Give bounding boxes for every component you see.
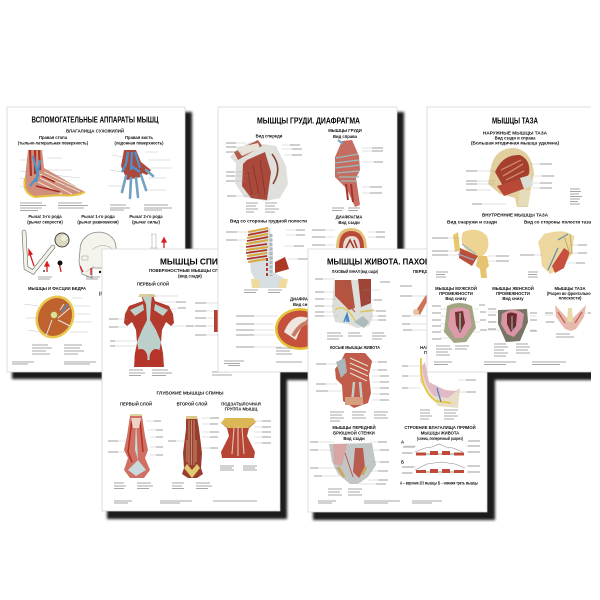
figure: inguinal canal <box>332 279 374 328</box>
footer <box>318 501 442 503</box>
heading: first layer: ПЕРВЫЙ СЛОЙ <box>137 282 169 286</box>
heading: diaphragm bottom view: Вид снизу <box>293 302 315 307</box>
poster: auxiliary apparatus of muscles <box>7 107 185 372</box>
leader lines: chest cavity figure <box>237 230 298 259</box>
figure: diaphragm top view <box>336 228 367 248</box>
figure: deep muscles first layer <box>124 414 150 478</box>
figure: arm with ball <box>24 232 69 272</box>
figure: female perineum <box>498 309 528 342</box>
heading: rectus sheath structure: (схема, поперечный разрез) <box>417 436 463 441</box>
legends: upper figures <box>20 203 172 210</box>
leader lines: internal medial <box>534 245 578 263</box>
legends: anterior wall <box>328 489 362 495</box>
legends: lever figures <box>38 277 100 279</box>
captions: internal views: Вид снаружи и сзади <box>447 220 497 224</box>
leader lines: anterior figure <box>408 296 428 330</box>
heading: diaphragm bottom view <box>290 296 317 307</box>
captions: internal views: Вид со стороны полости таза <box>524 220 592 224</box>
figure: oblique torso <box>335 353 372 408</box>
footer <box>114 501 257 503</box>
figure: external inguinal view <box>420 358 460 408</box>
subheadings: deep layers <box>120 402 261 412</box>
footer <box>434 362 566 364</box>
caption: right hand: (ладонная поверхность) <box>114 140 164 146</box>
heading: external pelvic muscles: (Большая ягодичная мышца удалена) <box>471 140 560 146</box>
poster: chest muscles and diaphragm <box>218 107 397 372</box>
leader lines: sheath diagrams <box>404 446 470 473</box>
legends: surface layer <box>129 370 232 376</box>
poster: abdominal muscles and inguinal canal <box>308 249 487 512</box>
heading: male perineum: Вид снизу <box>445 296 467 301</box>
heading: pelvic muscles frontal section: (Разрез во фронтальной <box>547 291 593 296</box>
heading: pelvic muscles frontal section: плоскости) <box>559 296 582 300</box>
heading: female perineum: Вид снизу <box>502 296 524 301</box>
legends: chest figures <box>246 203 360 212</box>
caption: right hand <box>114 135 164 146</box>
legends: deep figures <box>114 466 257 488</box>
figure: chest side view <box>335 140 360 207</box>
heading: external pelvic muscles: НАРУЖНЫЕ МЫШЦЫ ТАЗА <box>483 130 547 136</box>
heading: anterior abdominal wall: Вид сзади <box>343 436 365 441</box>
leader lines: deep figures <box>118 418 262 455</box>
figure: sheath cross-section A: А <box>401 440 404 444</box>
legends: inguinal canal <box>327 333 386 339</box>
caption: second-class lever: Рычаг 2-го рода <box>129 214 163 219</box>
leader lines: perineum figures <box>440 309 589 338</box>
title: ВСПОМОГАТЕЛЬНЫЕ АППАРАТЫ МЫШЦ <box>32 116 159 124</box>
leader lines and legends: thigh <box>24 298 92 332</box>
heading: pelvic muscles frontal section: МЫШЦЫ ТАЗА <box>554 286 586 291</box>
heading: external pelvic muscles <box>471 130 560 146</box>
legends: oblique torso <box>330 412 388 421</box>
legends and footer <box>224 348 302 366</box>
heading: external pelvic muscles: Вид сзади и справа <box>495 136 536 140</box>
caption: diaphragm top view: Вид сзади <box>338 220 360 225</box>
heading: external (partly hidden) <box>420 345 445 355</box>
caption: chest muscles right view: Вид справа <box>333 134 358 139</box>
figure: sheath cross-section B <box>401 460 465 473</box>
caption: diaphragm top view <box>336 214 362 225</box>
caption: first-class lever <box>77 214 119 224</box>
subheadings: deep layers: ПОДЗАТЫЛОЧНАЯ <box>221 402 261 406</box>
drop shadows behind posters <box>12 112 600 520</box>
icon: black lever weights <box>43 260 101 273</box>
caption: first-class lever: (рычаг равновесия) <box>77 220 119 224</box>
heading: inguinal canal: ПАХОВЫЙ КАНАЛ (вид сзади) <box>332 269 378 274</box>
heading: anterior abdominal wall: МЫШЦЫ ПЕРЕДНЕЙ <box>332 425 376 430</box>
leader lines: anterior wall <box>316 442 380 484</box>
legends: perineum figures <box>436 334 574 356</box>
subheadings: deep layers: ПЕРВЫЙ СЛОЙ <box>120 402 152 406</box>
heading: female perineum <box>492 286 534 301</box>
caption: right foot: Правая стопа <box>39 135 68 140</box>
caption: diaphragm top view: ДИАФРАГМА <box>336 214 362 220</box>
heading: internal pelvic muscles: ВНУТРЕННИЕ МЫШЦЫ ТАЗА <box>482 212 548 218</box>
poster: pelvic muscles <box>427 107 600 372</box>
heading: pelvic muscles frontal section <box>547 287 590 300</box>
figure: male perineum <box>444 303 476 343</box>
infographic: set of five anatomy posters <box>6 106 591 522</box>
figure: foot <box>24 150 85 197</box>
heading: deep back muscles: ГЛУБОКИЕ МЫШЦЫ СПИНЫ <box>156 390 224 396</box>
figure: chest front view <box>230 140 288 201</box>
heading: muscles and fasciae of the thigh: МЫШЦЫ И ФАСЦИИ БЕДРА <box>28 286 87 291</box>
caption: third-class lever <box>27 214 63 224</box>
heading: oblique muscles: КОСЫЕ МЫШЦЫ ЖИВОТА <box>330 345 380 350</box>
caption: chest muscles right view: МЫШЦЫ ГРУДИ <box>328 128 362 133</box>
figure: suboccipital muscles <box>221 418 256 458</box>
heading: external (partly hidden): ПАХОВ <box>424 350 439 355</box>
hidden second-layer figure: labels <box>195 303 220 335</box>
heading: superficial back muscles: ПОВЕРХНОСТНЫЕ МЫШЦЫ СПИНЫ <box>149 268 229 273</box>
subheadings: deep layers: ГРУППА МЫШЦ <box>225 406 258 412</box>
heading: superficial back muscles: (вид сзади) <box>178 274 202 278</box>
figure: deep muscles second layer <box>182 416 203 478</box>
leader lines: diaphragm bottom view <box>254 316 282 347</box>
figure: sheath cross-section B: Б <box>401 460 404 464</box>
heading: male perineum <box>435 286 477 301</box>
caption: chest muscles right view <box>328 128 362 139</box>
heading: rectus sheath structure: МЫШЦЫ ЖИВОТА <box>421 430 459 436</box>
caption: front view: Вид спереди <box>256 134 283 138</box>
figure: internal pelvic muscles lateral <box>453 230 489 278</box>
title: МЫШЦЫ ТАЗА <box>492 116 538 126</box>
heading: rectus sheath structure: СТРОЕНИЕ ВЛАГАЛИЩА ПРЯМОЙ <box>404 425 476 430</box>
figure: leg muscle <box>413 295 429 315</box>
leader lines: inguinal canal <box>323 279 380 320</box>
captions: internal views <box>447 220 591 224</box>
caption: second-class lever: (рычаг силы) <box>132 220 160 224</box>
leader lines: internal lateral <box>448 238 496 261</box>
caption: right foot: (тыльно-латеральная поверхность) <box>18 140 89 146</box>
legend: external pelvic muscles <box>570 189 582 204</box>
title: МЫШЦЫ ЖИВОТА. ПАХОВЫЙ КАНАЛ <box>327 258 473 266</box>
heading: female perineum: ПРОМЕЖНОСТИ <box>496 291 530 296</box>
leader lines: external inguinal view <box>408 366 466 392</box>
leader lines: back torso <box>114 296 186 346</box>
caption: sheath key: А – верхние 2/3 мышцы Б – нижняя треть мышцы <box>400 480 478 486</box>
leader lines: diaphragm top view <box>325 230 376 245</box>
leader lines: external pelvic muscles <box>477 164 542 204</box>
heading: diaphragm bottom view: ДИАФРАГМА <box>290 296 317 302</box>
figure: chest cavity view <box>246 228 289 288</box>
heading: external (partly hidden): НАРУЖНЫЕ <box>420 345 445 350</box>
figure: external pelvic muscles <box>488 148 534 207</box>
heading: male perineum: ПРОМЕЖНОСТИ <box>439 291 473 296</box>
heading: anterior abdominal wall <box>332 425 376 441</box>
icons: red force arrows <box>29 238 166 275</box>
figure: diaphragm bottom view <box>275 308 325 350</box>
caption: third-class lever: (рычаг скорости) <box>27 220 63 224</box>
heading: anterior abdominal wall: БРЮШНОЙ СТЕНКИ <box>333 430 375 436</box>
figure: anterior wall from behind <box>329 443 376 484</box>
footer <box>12 362 96 364</box>
caption: first-class lever: Рычаг 1-го рода <box>81 214 115 219</box>
heading: superficial back muscles <box>149 268 229 278</box>
caption: second-class lever <box>129 214 163 224</box>
figure: sheath cross-section A <box>401 440 464 456</box>
caption: right foot <box>18 135 89 146</box>
caption: third-class lever: Рычаг 3-го рода <box>28 214 62 219</box>
figure: skull <box>79 232 116 278</box>
figure: back torso <box>124 294 174 367</box>
figure: foot bones <box>150 234 158 248</box>
caption: view from chest cavity: Вид со стороны грудной полости <box>230 218 307 224</box>
caption: right hand: Правая кисть <box>125 135 153 140</box>
subheadings: deep layers: ВТОРОЙ СЛОЙ <box>177 402 207 406</box>
heading: male perineum: МЫШЦЫ МУЖСКОЙ <box>435 286 477 291</box>
leader lines and labels: upper figures <box>20 152 172 196</box>
leader lines: oblique torso <box>326 362 380 400</box>
title: МЫШЦЫ СПИНЫ <box>160 258 232 266</box>
figure: thigh cross-section <box>28 289 82 345</box>
heading: rectus sheath structure <box>404 425 476 441</box>
figure: hand <box>121 150 153 198</box>
leader lines: chest figures <box>234 143 374 196</box>
title: МЫШЦЫ ГРУДИ. ДИАФРАГМА <box>257 116 360 126</box>
heading: anterior (partly hidden): ПЕРЕДНЯЯ <box>413 269 436 274</box>
figure: pelvis frontal section <box>555 305 586 331</box>
figure: internal pelvic muscles medial <box>538 231 574 274</box>
poster: back muscles <box>102 249 280 511</box>
partly hidden caption: (б <box>99 291 103 296</box>
heading: female perineum: МЫШЦЫ ЖЕНСКОЙ <box>492 286 534 291</box>
heading: tendon sheaths: ВЛАГАЛИЩА СУХОЖИЛИЙ <box>66 128 124 134</box>
